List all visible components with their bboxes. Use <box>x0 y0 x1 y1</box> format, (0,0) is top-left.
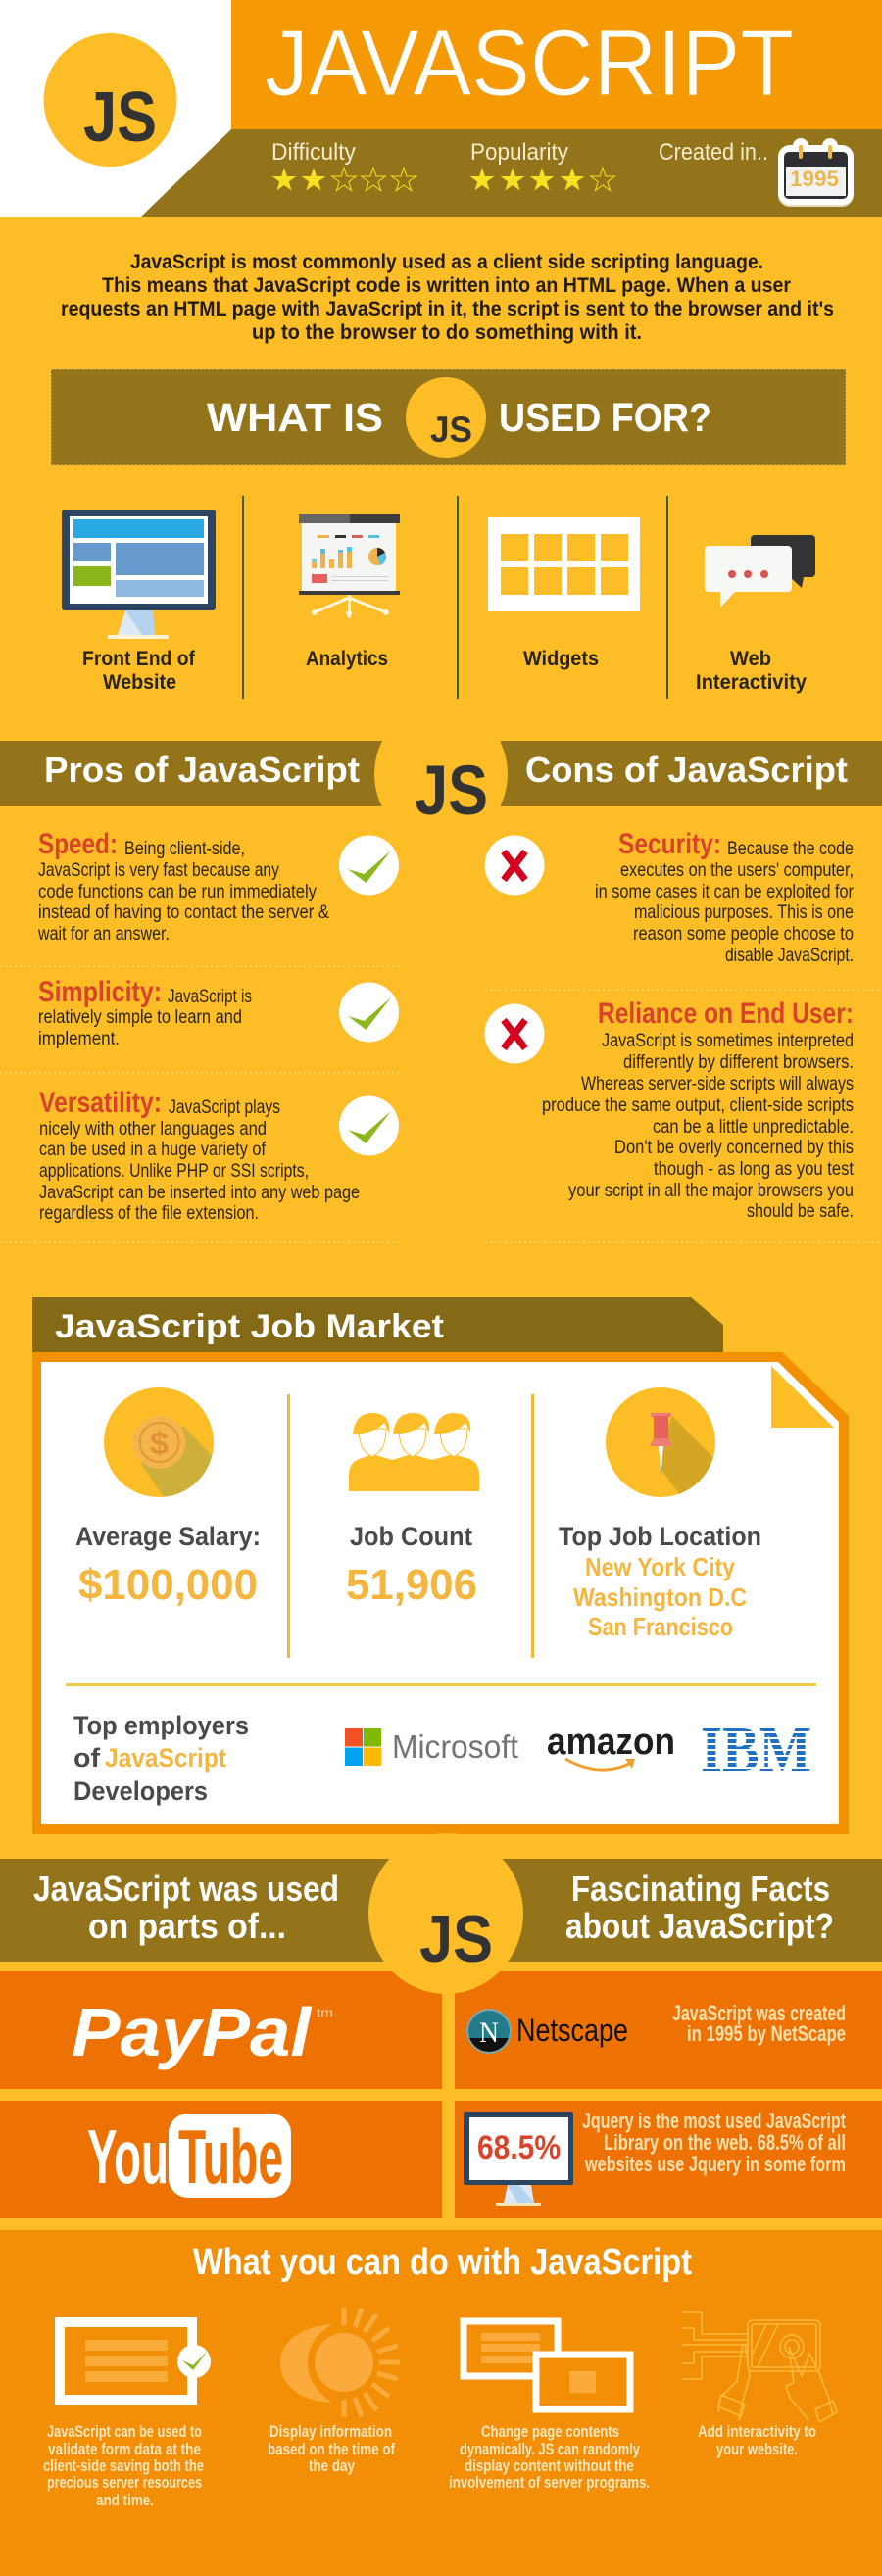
top job location stat: San Francisco <box>588 1612 733 1641</box>
caption: time of day: based on the time of <box>268 2440 395 2458</box>
caption: dynamic content: Change page contents <box>481 2422 619 2441</box>
con: security: disable JavaScript. <box>725 945 854 966</box>
caption: time of day: the day <box>309 2456 355 2475</box>
top employers heading: Developers <box>74 1776 208 1806</box>
con: reliance on end user: should be safe. <box>747 1200 854 1222</box>
caption: dynamic content: display content without the <box>465 2456 634 2475</box>
logo: Netscape: N <box>479 2017 499 2049</box>
icon: analytics presentation board <box>299 514 400 618</box>
pro: speed: JavaScript is very fast because any <box>38 859 279 881</box>
job count stat: 51,906 <box>346 1561 477 1609</box>
caption: dynamic content: dynamically. JS can randomly <box>460 2440 640 2458</box>
icon: chat bubbles <box>705 535 815 608</box>
created in label: Created in.. <box>659 139 768 166</box>
icon: check versatility <box>339 1095 399 1156</box>
job count stat <box>346 1522 477 1609</box>
pro: versatility <box>39 1087 360 1224</box>
pro: versatility: Versatility: <box>39 1087 162 1119</box>
header <box>0 0 882 217</box>
con: security: Security: <box>618 828 721 860</box>
top job location stat: Top Job Location <box>559 1522 761 1551</box>
caption: form validation: validate form data at the <box>48 2440 201 2458</box>
top employers heading: of <box>74 1743 101 1773</box>
pro: simplicity: implement. <box>38 1028 120 1049</box>
pro: simplicity: relatively simple to learn and <box>38 1006 242 1028</box>
icon: dynamic windows <box>464 2321 630 2409</box>
icon: people <box>349 1413 479 1491</box>
title: JAVASCRIPT <box>265 11 794 116</box>
label: front end of website <box>82 648 196 694</box>
intro paragraph: up to the browser to do something with it. <box>252 321 642 344</box>
intro paragraph <box>61 251 834 344</box>
icon: widgets grid <box>488 517 640 611</box>
icon: calendar 1995: 1995 <box>790 167 839 191</box>
label: analytics: Analytics <box>306 648 388 670</box>
facts header band: about JavaScript? <box>565 1906 834 1946</box>
average salary stat <box>75 1522 261 1609</box>
label: front end of website: Front End of <box>82 648 196 670</box>
pro: versatility: JavaScript can be inserted into any web page <box>39 1182 360 1203</box>
heading: what you can do: What you can do with JavaScript <box>193 2242 692 2283</box>
logo: Netscape <box>466 2009 628 2054</box>
label: web interactivity: Interactivity <box>696 671 807 694</box>
con: reliance on end user: though - as long as you test <box>654 1158 854 1180</box>
top employers heading: JavaScript <box>105 1743 226 1773</box>
logo: YouTube: Tube <box>178 2114 283 2200</box>
logo: JS circle <box>43 33 176 167</box>
panel: job market <box>32 1297 849 1834</box>
caption: dynamic content <box>449 2422 650 2492</box>
logo: Microsoft <box>345 1728 518 1766</box>
pros and cons header <box>0 704 882 845</box>
caption: dynamic content: involvement of server programs. <box>449 2473 650 2492</box>
intro paragraph: requests an HTML page with JavaScript in it, the script is sent to the browser and it's <box>61 298 834 320</box>
con: security <box>595 828 854 966</box>
banner: what is JS used for <box>51 369 846 465</box>
pros and cons header: JS <box>415 753 488 830</box>
intro paragraph: JavaScript is most commonly used as a client side scripting language. <box>130 251 763 273</box>
logo: PayPal: PayPal <box>72 1994 313 2070</box>
logo: Amazon: amazon <box>547 1722 675 1763</box>
top employers heading: Top employers <box>74 1711 249 1740</box>
top job location stat: Washington D.C <box>573 1582 747 1612</box>
icon: jQuery monitor 68.5%: 68.5% <box>477 2129 561 2166</box>
caption: form validation: client-side saving both the <box>43 2456 204 2475</box>
caption: time of day: Display information <box>270 2422 392 2441</box>
caption: form validation: JavaScript can be used to <box>47 2422 202 2441</box>
icon: sun and moon <box>280 2308 400 2417</box>
label: web interactivity <box>696 648 807 694</box>
caption: form validation: and time. <box>96 2491 154 2509</box>
icon: form validation <box>60 2322 211 2400</box>
con: reliance on end user <box>542 997 854 1222</box>
orange tiles <box>0 1971 882 2218</box>
logo: Microsoft: Microsoft <box>392 1728 518 1765</box>
pro: simplicity: JavaScript is <box>168 986 252 1007</box>
banner: what is JS used for: WHAT IS <box>207 395 383 440</box>
icon: cross security <box>484 835 545 896</box>
pros and cons header: Cons of JavaScript <box>525 750 848 790</box>
average salary stat: $100,000 <box>78 1561 258 1609</box>
pro: speed: instead of having to contact the server & <box>38 901 329 923</box>
logo: PayPal: tm <box>317 2006 333 2019</box>
fact: jquery usage <box>582 2109 846 2176</box>
icon: jQuery monitor 68.5% <box>464 2112 573 2206</box>
icon: check speed <box>339 835 399 896</box>
panel: what you can do <box>0 2230 882 2576</box>
popularity rating <box>470 139 614 191</box>
pro: speed: Being client-side, <box>124 838 245 859</box>
icon: calendar 1995 <box>778 138 854 207</box>
label: web interactivity: Web <box>730 648 771 670</box>
icon: website monitor <box>62 510 216 639</box>
fact: created by NetScape <box>672 2001 846 2046</box>
average salary stat: Average Salary: <box>75 1522 261 1551</box>
caption: form validation <box>43 2422 204 2509</box>
facts header band: Fascinating Facts <box>571 1869 830 1909</box>
pros and cons header: Pros of JavaScript <box>44 750 360 790</box>
con: security: Because the code <box>727 838 854 859</box>
job market tab heading: JavaScript Job Market <box>55 1308 444 1345</box>
label: widgets: Widgets <box>523 648 599 670</box>
icon: hands on tablet <box>682 2312 837 2422</box>
facts header band: JS <box>419 1902 493 1976</box>
label: front end of website: Website <box>103 671 176 694</box>
pro: speed: Speed: <box>38 828 118 860</box>
top job location stat: New York City <box>585 1552 735 1581</box>
top employers heading <box>74 1711 249 1806</box>
top job location stat <box>559 1522 761 1641</box>
difficulty rating: Difficulty <box>271 139 356 166</box>
pro: versatility: JavaScript plays <box>169 1096 280 1118</box>
icon: cross reliance <box>484 1003 545 1064</box>
icon: salary coin: $ <box>150 1426 169 1461</box>
pro: simplicity: Simplicity: <box>38 976 162 1008</box>
caption: form validation: precious server resources <box>47 2473 202 2492</box>
facts header band <box>0 1833 882 1994</box>
job count stat: Job Count <box>350 1522 472 1551</box>
caption: interactivity: your website. <box>716 2440 798 2458</box>
facts header band: on parts of... <box>88 1906 286 1946</box>
pro: speed: code functions can be run immediately <box>38 881 317 902</box>
facts header band: JavaScript was used <box>33 1869 339 1909</box>
pro: speed: wait for an answer. <box>37 923 170 945</box>
intro paragraph: This means that JavaScript code is written into an HTML page. When a user <box>102 274 791 297</box>
caption: interactivity: Add interactivity to <box>698 2422 816 2441</box>
banner: what is JS used for: USED FOR? <box>499 395 711 440</box>
pro: versatility: nicely with other languages and <box>39 1118 267 1140</box>
job market tab heading <box>32 1297 723 1352</box>
logo: IBM: IBM <box>701 1714 811 1785</box>
popularity rating: Popularity <box>470 139 568 166</box>
logo: YouTube: You <box>87 2114 169 2200</box>
caption: time of day <box>268 2422 395 2475</box>
difficulty rating <box>271 139 416 191</box>
icon: check simplicity <box>339 982 399 1043</box>
pro: simplicity <box>38 976 252 1049</box>
pro: versatility: applications. Unlike PHP or SSI scripts, <box>39 1160 309 1182</box>
pro: speed <box>37 828 329 945</box>
pro: versatility: can be used in a huge variety of <box>39 1139 266 1160</box>
logo: Netscape: Netscape <box>516 2013 628 2048</box>
logo: JS circle: JS <box>83 78 157 157</box>
caption: interactivity <box>698 2422 816 2458</box>
icon: salary coin <box>104 1387 214 1497</box>
logo: YouTube <box>87 2114 291 2200</box>
pro: versatility: regardless of the file extension. <box>39 1202 259 1224</box>
icon: location pin <box>606 1387 715 1497</box>
banner: what is JS used for: JS <box>430 410 472 450</box>
